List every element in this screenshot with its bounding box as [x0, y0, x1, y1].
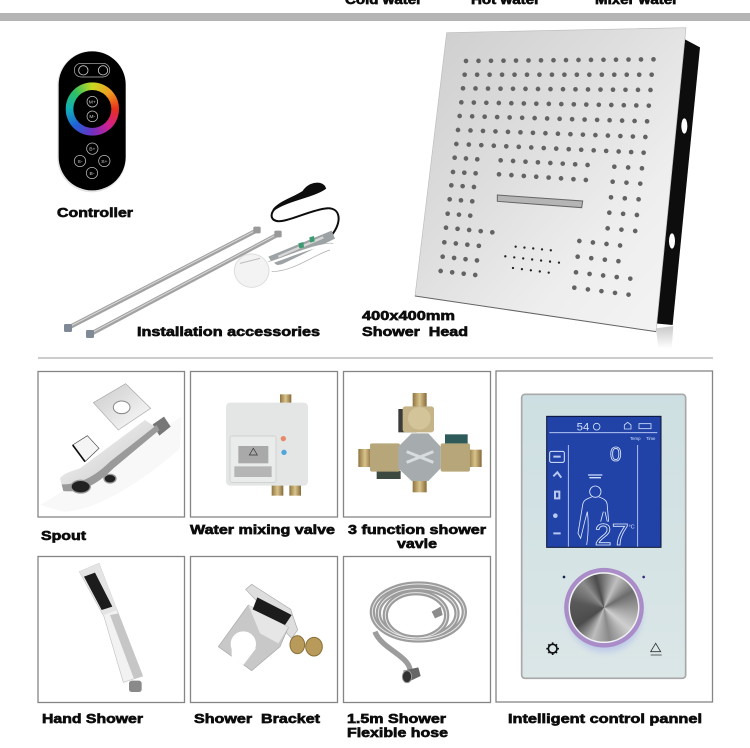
control knob: [566, 570, 642, 652]
LCD screen: 0: [610, 443, 621, 466]
top header captions: [345, 0, 678, 7]
icon: remote controller: [57, 51, 126, 192]
LCD screen: [547, 416, 661, 552]
panel: intelligent control panel: [496, 371, 712, 702]
label: controller: Controller: [57, 205, 133, 220]
panel: spout: [38, 372, 184, 517]
label: flexible hose: 1.5m Shower: [347, 711, 446, 726]
divider: [38, 358, 713, 359]
panel: 3 function shower valve: [344, 372, 490, 517]
label: spout: Spout: [41, 528, 87, 543]
label: flexible hose: Flexible hose: [347, 725, 448, 740]
panel: water mixing valve: [190, 372, 338, 517]
LCD screen: 27: [595, 518, 629, 552]
LCD screen: Time: [646, 436, 656, 441]
label: 3 function shower valve: 3 function shower: [348, 522, 486, 537]
panel: shower bracket: [190, 556, 338, 702]
icon: remote controller: M-: [89, 114, 96, 120]
LCD screen: Temp: [630, 436, 641, 441]
label: 3 function shower valve: [348, 522, 486, 551]
icon: remote controller: S+: [101, 159, 108, 165]
icon: installation accessories: [64, 184, 339, 338]
panel: flexible hose: [344, 556, 490, 702]
label: intelligent control panel: Intelligent control pannel: [508, 711, 702, 726]
top grey band: [0, 13, 750, 21]
icon: remote controller: S-: [78, 159, 83, 165]
label: shower head size: Shower Head: [362, 324, 468, 339]
panel: hand shower: [38, 556, 184, 702]
label: shower head size: [362, 308, 468, 339]
label: installation accessories: Installation accessories: [137, 324, 320, 339]
label: flexible hose: [347, 711, 448, 740]
label: hand shower: Hand Shower: [42, 711, 143, 726]
icon: remote controller: M+: [89, 99, 96, 105]
label: shower bracket: Shower Bracket: [194, 711, 321, 726]
LCD screen: 54: [577, 422, 589, 434]
LCD screen: °C: [629, 524, 635, 530]
icon: shower mode: [651, 643, 662, 655]
icon: square shower head: [415, 28, 700, 348]
label: water mixing valve: Water mixing valve: [190, 522, 335, 537]
icon: remote controller: B+: [89, 147, 96, 153]
label: shower head size: 400x400mm: [362, 308, 455, 323]
label: 3 function shower valve: vavle: [397, 536, 437, 551]
icon: settings gear: [546, 642, 559, 655]
icon: remote controller: B-: [90, 171, 95, 177]
